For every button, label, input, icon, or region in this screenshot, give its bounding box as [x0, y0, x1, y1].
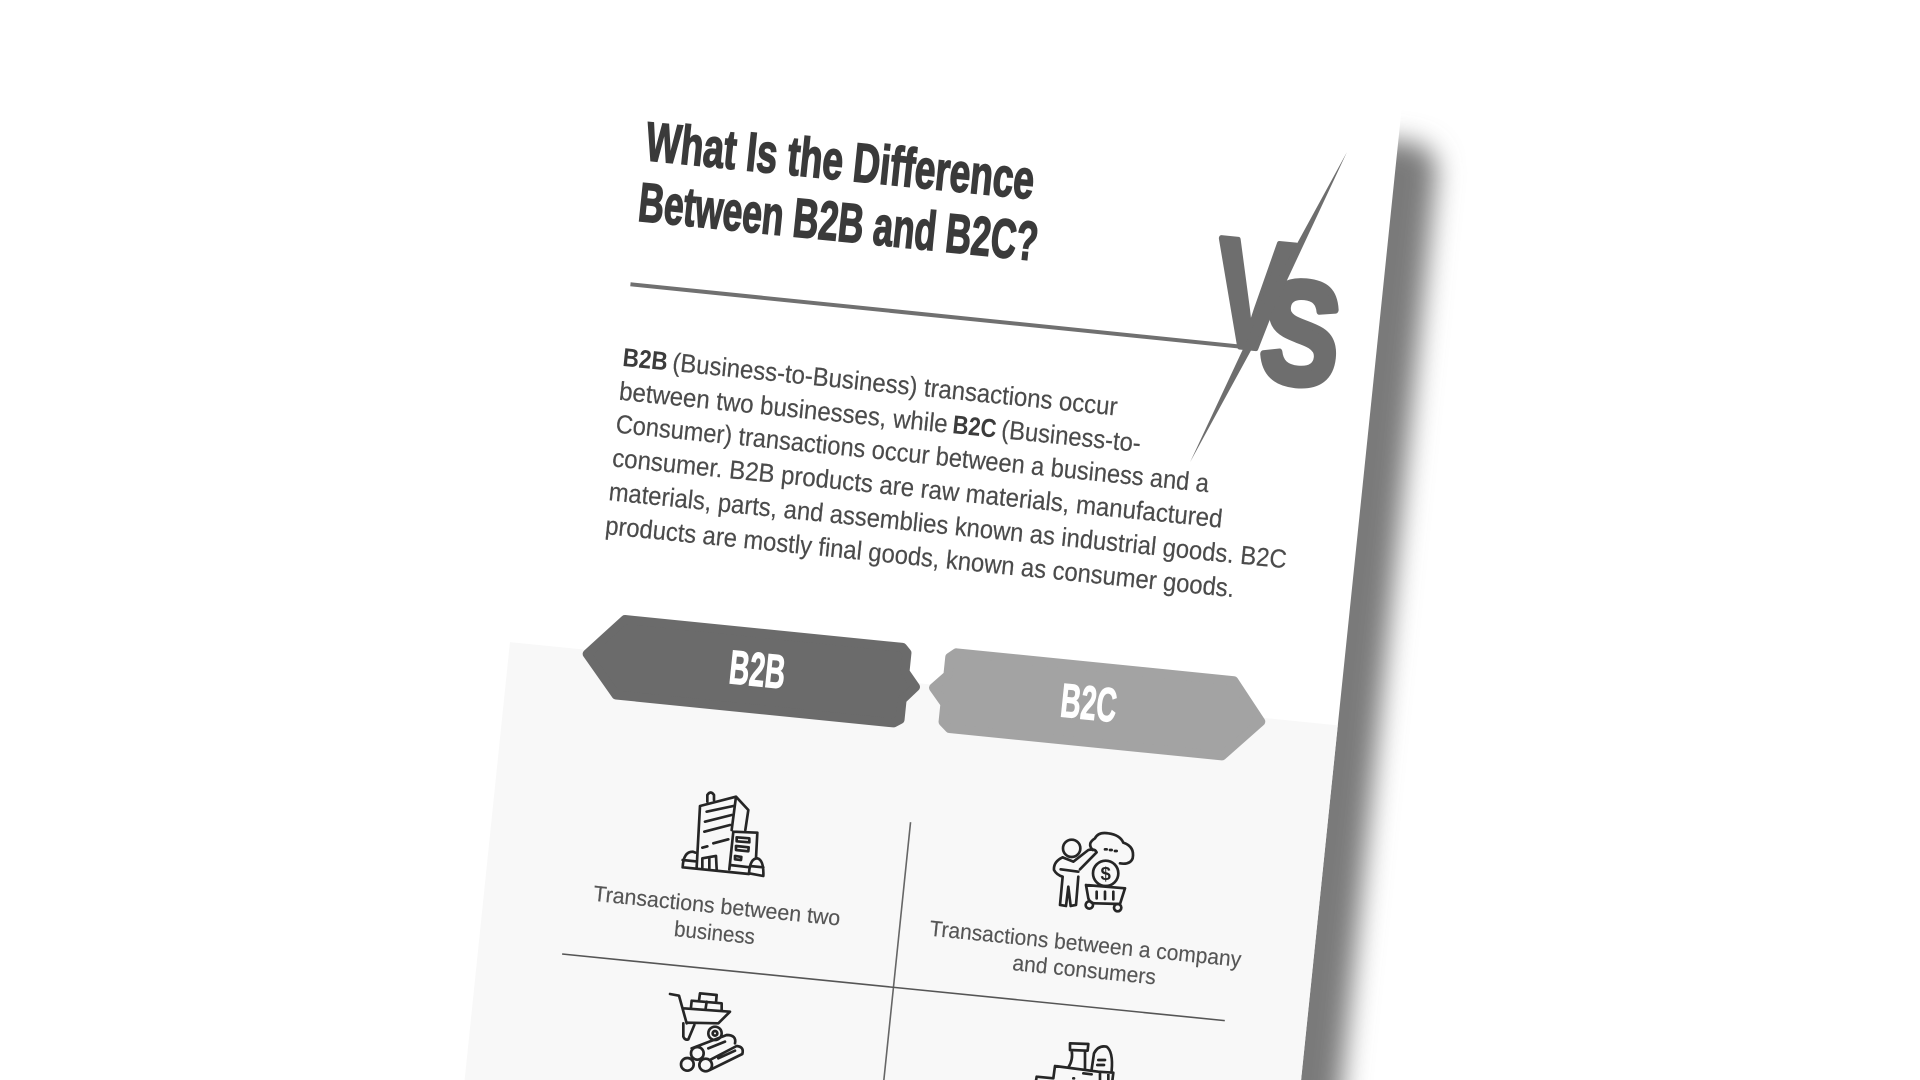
- VS emblem: V: [1206, 205, 1300, 384]
- intro paragraph: products are mostly final goods, known as consumer goods.: [604, 510, 1236, 603]
- grid divider: vertical: [854, 822, 911, 1080]
- intro paragraph: (Business-to-Business) transactions occur: [671, 347, 1119, 422]
- VS emblem: S: [1254, 248, 1348, 418]
- intro paragraph: materials, parts, and assemblies known as industrial goods. B2C: [607, 476, 1288, 574]
- caption: B2B transactions: Transactions between two: [592, 881, 842, 931]
- caption: B2C transactions: [926, 916, 1242, 998]
- panel: comparison background: [432, 642, 1338, 1080]
- badge: B2B: B2B: [727, 641, 788, 700]
- badge: B2C: B2C: [1058, 675, 1119, 733]
- badge: B2B: [583, 616, 919, 725]
- grid divider: horizontal: [562, 954, 1225, 1021]
- page sheet with shadow: [430, 0, 1446, 1080]
- title divider: [630, 284, 1250, 348]
- caption: B2B transactions: [589, 881, 842, 957]
- intro paragraph: B2C: [951, 409, 998, 444]
- intro paragraph: consumer. B2B products are raw materials, manufactured: [611, 442, 1224, 534]
- caption: B2B transactions: business: [673, 916, 756, 949]
- intro paragraph: Consumer) transactions occur between a business and a: [614, 409, 1211, 498]
- icon: office building: [683, 792, 763, 876]
- intro paragraph: between two businesses, while: [618, 376, 949, 439]
- caption: B2C transactions: Transactions between a company: [928, 916, 1242, 972]
- caption: B2C transactions: and consumers: [1011, 950, 1157, 989]
- icon: customer with shopping cart: $: [1100, 863, 1111, 884]
- intro paragraph: B2B: [621, 342, 669, 376]
- title: What Is the Difference: [643, 110, 1038, 211]
- page background: [431, 0, 1405, 1080]
- badge: B2C: [929, 651, 1265, 759]
- intro paragraph: [604, 342, 1302, 608]
- title: Between B2B and B2C?: [636, 171, 1041, 273]
- intro paragraph: (Business-to-: [1000, 414, 1142, 458]
- title: [636, 110, 1047, 273]
- icon: customer with shopping cart: [1054, 833, 1133, 911]
- icon: wheelbarrow and logs: [670, 993, 743, 1071]
- VS emblem: [1190, 140, 1359, 476]
- icon: factory goods: [1035, 1043, 1113, 1080]
- page shadow: [1219, 137, 1439, 1080]
